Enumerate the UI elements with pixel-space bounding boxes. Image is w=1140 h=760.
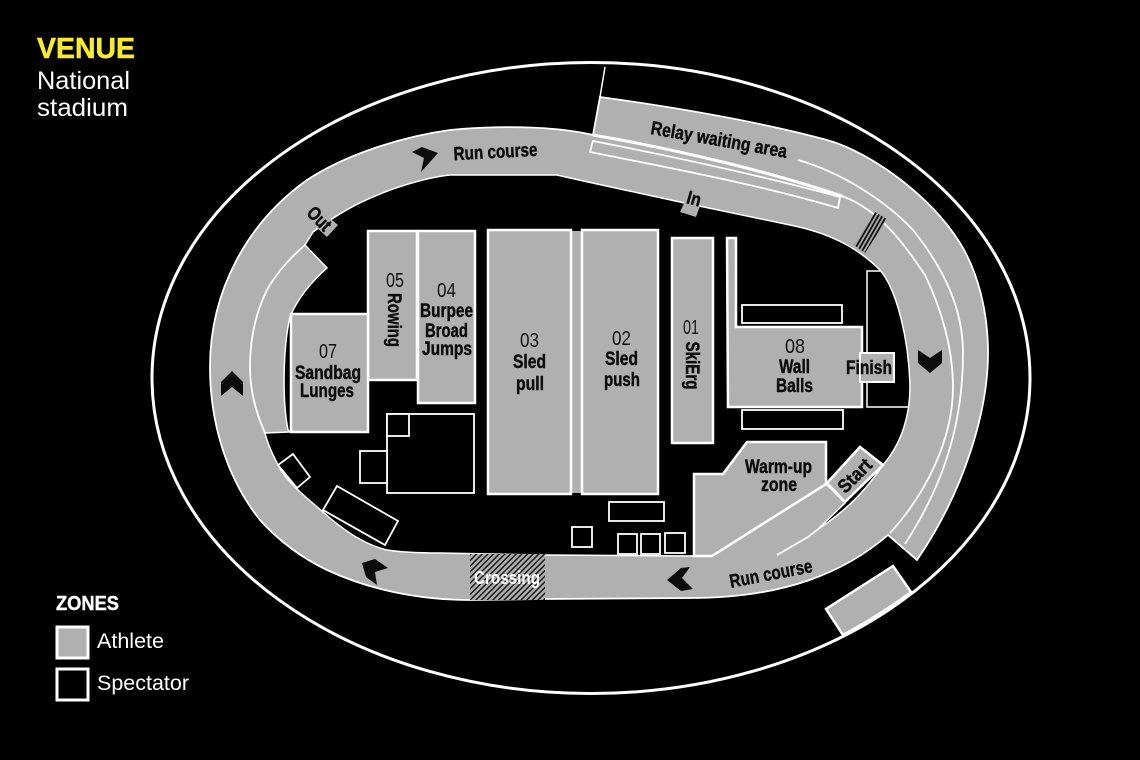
spectator: box b [618, 534, 637, 554]
title: stadium [37, 94, 128, 122]
spectator: box a [572, 527, 592, 547]
spectator: box c [641, 534, 660, 554]
finish [846, 353, 894, 382]
zone 01 skierg: 01 [683, 317, 699, 339]
spectator: rotated long [323, 486, 398, 545]
in gate [680, 188, 703, 217]
zone 08 wall balls: 08 [785, 336, 805, 358]
zone 02 sled push: Sled [605, 349, 638, 370]
zone 07 sandbag lunges: Lunges [300, 381, 354, 402]
divider strip between 03 and 02 [571, 231, 582, 493]
stadium outline [152, 62, 1030, 694]
zone 04 burpee broad jumps: Burpee [420, 301, 473, 322]
zone 03 sled pull: pull [516, 374, 544, 395]
zone 05 rowing: Rowing [383, 293, 404, 347]
legend: Athlete [97, 630, 164, 653]
warm-up zone: Warm-up [745, 457, 812, 478]
warm-up zone [694, 442, 826, 556]
in gate: In [684, 188, 703, 211]
arrow: top [412, 147, 438, 172]
spectator: box d [665, 533, 685, 553]
zone 02 sled push [582, 230, 658, 494]
zone 02 sled push: 02 [612, 328, 631, 350]
arrow: left [221, 371, 243, 396]
zone 04 burpee broad jumps: Jumps [422, 339, 472, 360]
zone 07 sandbag lunges [291, 314, 368, 432]
title: National [37, 67, 130, 95]
zone 08 wall balls: Balls [776, 376, 813, 397]
label: run course top: Run course [453, 140, 538, 165]
relay entry line [600, 67, 605, 97]
legend: ZONES [56, 593, 119, 615]
zone 05 rowing [368, 231, 417, 380]
out gate: Out [302, 203, 336, 236]
athlete zone: bottom right box [826, 566, 911, 635]
arrow: bottom right [667, 567, 693, 591]
legend: Spectator [97, 672, 189, 695]
right lane one [842, 196, 953, 533]
zone: relay waiting area label: Relay waiting area [649, 118, 789, 163]
zone 08 wall balls: Wall [779, 357, 810, 378]
spectator: above wall balls [742, 305, 842, 323]
zone 05 rowing: 05 [386, 270, 404, 292]
title [37, 33, 135, 122]
start lane line [777, 530, 817, 555]
warm-up zone: zone [761, 475, 797, 496]
spectator: outer box [867, 271, 909, 407]
right lane two [798, 160, 963, 544]
spectator: wide box [609, 502, 664, 521]
legend [56, 593, 189, 700]
finish: Finish [846, 358, 892, 379]
start [827, 447, 883, 502]
spectator: side square [360, 451, 387, 483]
spectator: small square [387, 414, 409, 436]
zone 04 burpee broad jumps [418, 231, 475, 403]
left lane divider [250, 245, 305, 433]
arrow: right [918, 350, 942, 373]
relay lane: box [590, 141, 840, 208]
zone 08 wall balls [727, 238, 862, 407]
relay lane: thick line [593, 135, 842, 196]
zone 07 sandbag lunges: Sandbag [295, 363, 361, 384]
spectator: large square [387, 414, 474, 493]
infield [265, 175, 910, 556]
spectator: below wall balls [742, 410, 843, 429]
zone 03 sled pull [488, 230, 571, 494]
hatch: track crossing [854, 212, 887, 253]
zone 03 sled pull: Sled [513, 352, 546, 373]
crossing [470, 554, 545, 600]
zone 01 skierg [672, 238, 713, 443]
zone 01 skierg: SkiErg [681, 342, 702, 390]
zone 04 burpee broad jumps: Broad [425, 321, 468, 342]
run course track [210, 97, 988, 600]
start: Start [834, 454, 877, 498]
arrow: bottom left [362, 559, 388, 585]
zone 04 burpee broad jumps: 04 [437, 280, 456, 302]
crossing: Crossing [474, 568, 540, 588]
zone 07 sandbag lunges: 07 [319, 341, 337, 363]
zone 02 sled push: push [604, 370, 640, 391]
label: run course bottom: Run course [728, 556, 814, 593]
zone 03 sled pull: 03 [520, 330, 539, 352]
title: VENUE [37, 33, 135, 65]
spectator: rotated small [278, 454, 310, 488]
